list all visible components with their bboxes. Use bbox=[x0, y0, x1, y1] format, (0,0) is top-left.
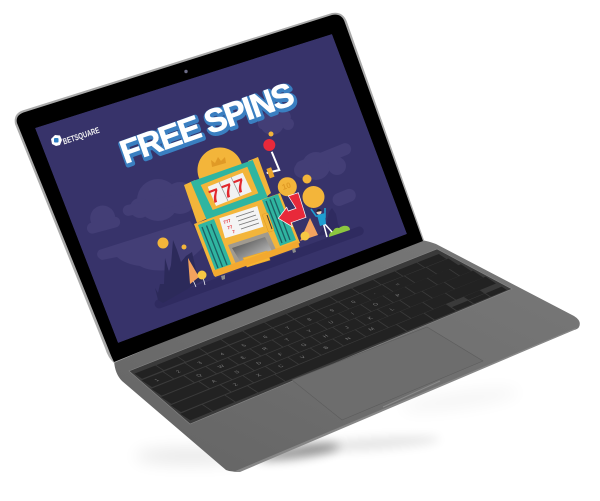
laptop base bbox=[114, 240, 580, 472]
machine dome bbox=[198, 148, 242, 179]
paytable card: 777 bbox=[223, 218, 232, 225]
person lifting coin bbox=[311, 208, 332, 237]
trackpad bbox=[292, 327, 483, 420]
red arrow bbox=[278, 193, 306, 227]
laptop lid bbox=[15, 13, 424, 363]
title: free spins: FREE SPINS bbox=[115, 75, 299, 171]
coin 10: 10 bbox=[281, 180, 293, 192]
green bush bbox=[329, 226, 350, 237]
right trees bbox=[300, 218, 318, 241]
title: free spins: FREE SPINS bbox=[116, 77, 300, 172]
keyboard: ZXCVBNM bbox=[232, 327, 377, 387]
screen bbox=[35, 34, 407, 343]
big coins bbox=[302, 174, 324, 208]
upper cabinet bbox=[184, 180, 208, 223]
logo: BETSQUARE bbox=[61, 125, 101, 146]
lever bbox=[267, 152, 279, 173]
slot machine bbox=[184, 132, 300, 280]
coins tray: COINS bbox=[248, 255, 262, 264]
lower cabinet bbox=[194, 193, 300, 276]
city silhouette bbox=[155, 240, 205, 303]
camera bbox=[184, 70, 188, 73]
reels 777: 7 bbox=[207, 185, 224, 209]
keyboard: ASDFGHJKL bbox=[210, 307, 396, 384]
keyboard bbox=[135, 254, 507, 420]
reels 777: 7 bbox=[232, 175, 249, 199]
keyboard: QWERTYUIOP bbox=[195, 293, 403, 378]
ground strip bbox=[153, 225, 365, 310]
left trees and coins bbox=[158, 238, 206, 287]
front lip bbox=[383, 381, 440, 407]
coin 10 bbox=[278, 177, 297, 196]
ground shadow bbox=[135, 384, 521, 464]
logo bbox=[51, 127, 100, 146]
paytable card: 7 bbox=[232, 229, 236, 234]
reels 777 bbox=[208, 178, 242, 203]
cabinet foot bbox=[212, 241, 300, 277]
paytable card: 77 bbox=[227, 224, 234, 230]
grill vents bbox=[202, 198, 290, 268]
coin slot bbox=[228, 232, 276, 263]
keyboard recess bbox=[129, 249, 512, 424]
keyboard: 1234567890-= bbox=[153, 283, 402, 383]
side coin slot bbox=[262, 213, 274, 232]
reels 777: 7 bbox=[220, 180, 237, 204]
background clouds bbox=[86, 110, 358, 271]
coins tray bbox=[243, 251, 270, 267]
paytable card bbox=[219, 206, 263, 238]
